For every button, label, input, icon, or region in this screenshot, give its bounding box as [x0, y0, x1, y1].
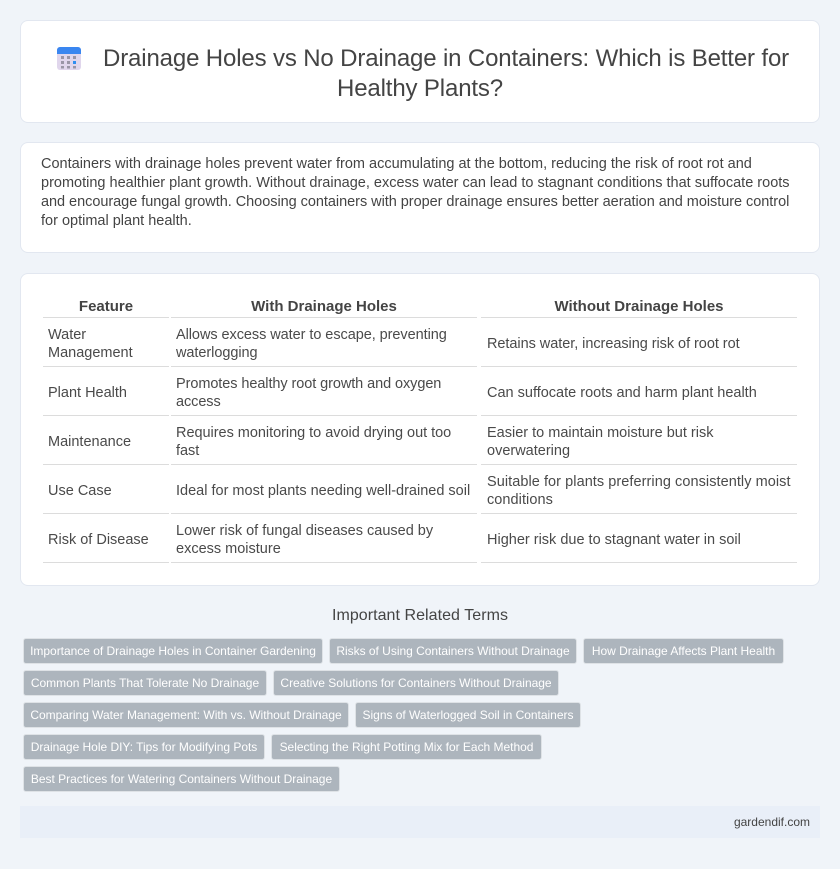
row: plant health: Promotes healthy root growth and oxygen	[176, 376, 441, 392]
row: maintenance: Maintenance	[48, 434, 131, 450]
title card	[20, 20, 820, 123]
tag: Selecting the Right Potting Mix for Each Method	[280, 740, 533, 754]
row: maintenance: Easier to maintain moisture but risk	[487, 425, 713, 441]
comparison table panel	[20, 273, 820, 586]
row: water management	[43, 327, 797, 367]
row: water management: Management	[48, 345, 133, 361]
tag: Risks of Using Containers Without Drainage	[336, 644, 570, 658]
row: use case: conditions	[487, 492, 553, 508]
footer bar	[20, 806, 820, 838]
tag	[23, 670, 267, 696]
row: use case: Ideal for most plants needing well-drained soil	[176, 483, 470, 499]
related terms tags	[23, 638, 784, 792]
tag	[329, 638, 577, 664]
intro text: promoting healthier plant growth. Without drainage, excess water can lead to stagnant conditions that suffocate roots	[41, 175, 790, 191]
intro text: and encourage fungal growth. Choosing containers with proper drainage ensures better aeration and moisture control	[41, 194, 789, 210]
row: maintenance: overwatering	[487, 443, 570, 459]
table header: Feature	[79, 298, 133, 315]
row: maintenance	[43, 425, 797, 465]
row: maintenance: Requires monitoring to avoid drying out too	[176, 425, 451, 441]
tag	[271, 734, 542, 760]
row: risk of disease	[43, 523, 797, 563]
title: Drainage Holes vs No Drainage in Containers: Which is Better for	[103, 45, 789, 72]
tag: Common Plants That Tolerate No Drainage	[31, 676, 259, 690]
row: use case: Use Case	[48, 483, 112, 499]
row: risk of disease: Risk of Disease	[48, 532, 149, 548]
tag: Signs of Waterlogged Soil in Containers	[363, 708, 573, 722]
tag	[23, 702, 349, 728]
row: use case	[43, 474, 797, 514]
intro text: for optimal plant health.	[41, 213, 192, 229]
tag: Best Practices for Watering Containers Without Drainage	[31, 772, 332, 786]
table header: Without Drainage Holes	[554, 298, 724, 315]
row: water management: Water	[48, 327, 86, 343]
tag: Drainage Hole DIY: Tips for Modifying Pots	[31, 740, 257, 754]
row: risk of disease: Lower risk of fungal diseases caused by	[176, 523, 433, 539]
row: risk of disease: Higher risk due to stagnant water in soil	[487, 532, 741, 548]
tag	[23, 734, 265, 760]
tag	[355, 702, 581, 728]
row: plant health	[43, 376, 797, 416]
tag	[583, 638, 784, 664]
footer text: site name: gardendif.com	[734, 815, 810, 829]
tag	[273, 670, 559, 696]
row: plant health: Can suffocate roots and harm plant health	[487, 385, 757, 401]
intro text	[41, 156, 790, 229]
row: plant health: Plant Health	[48, 385, 127, 401]
table	[43, 298, 797, 563]
row: water management: Allows excess water to escape, preventing	[176, 327, 447, 343]
intro text: Containers with drainage holes prevent water from accumulating at the bottom, reducing the risk of root rot and	[41, 156, 752, 172]
table header	[43, 298, 797, 318]
intro card	[20, 142, 820, 253]
row: plant health: access	[176, 394, 221, 410]
tag	[23, 766, 340, 792]
row: maintenance: fast	[176, 443, 199, 459]
title: Healthy Plants?	[337, 75, 503, 102]
related terms heading: Important Related Terms	[332, 607, 508, 624]
icon: calendar	[57, 47, 81, 70]
tag: Creative Solutions for Containers Without Drainage	[280, 676, 552, 690]
row: use case: Suitable for plants preferring consistently moist	[487, 474, 791, 490]
tag: How Drainage Affects Plant Health	[592, 644, 775, 658]
row: water management: Retains water, increasing risk of root rot	[487, 336, 740, 352]
row: risk of disease: excess moisture	[176, 541, 281, 557]
table header: With Drainage Holes	[251, 298, 397, 315]
tag	[23, 638, 323, 664]
tag: Importance of Drainage Holes in Container Gardening	[30, 644, 316, 658]
row: water management: waterlogging	[176, 345, 258, 361]
tag: Comparing Water Management: With vs. Without Drainage	[30, 708, 342, 722]
title	[103, 45, 789, 102]
